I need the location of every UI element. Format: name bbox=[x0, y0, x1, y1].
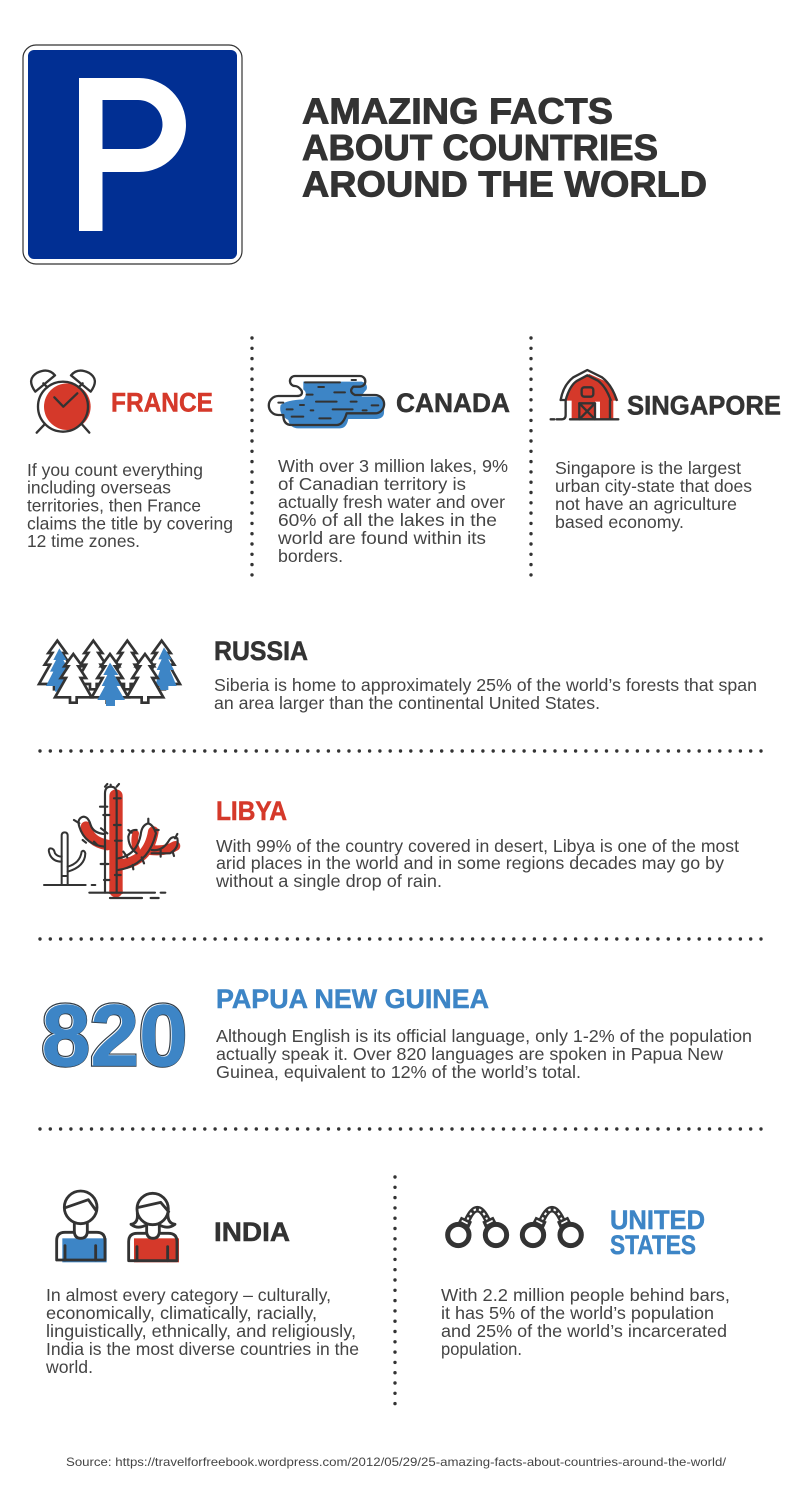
text: Singapore fact: based economy. bbox=[555, 512, 684, 532]
icon: number 820: 820 bbox=[41, 987, 187, 1084]
heading: Singapore: SINGAPORE bbox=[627, 390, 781, 420]
title: ABOUT COUNTRIES bbox=[302, 127, 658, 168]
text: Papua New Guinea fact: actually speak it. Over 820 languages are spoken in Papua New bbox=[216, 1044, 723, 1064]
icon: cactus bbox=[44, 784, 178, 898]
text: Russia fact: Siberia is home to approximately 25% of the world’s forests that span bbox=[214, 675, 757, 695]
text: India fact: India is the most diverse countries in the bbox=[46, 1339, 359, 1359]
heading: United States: STATES bbox=[610, 1230, 696, 1260]
heading: France: FRANCE bbox=[111, 388, 213, 418]
text: Singapore fact: urban city-state that does bbox=[555, 476, 752, 496]
panel: France bbox=[27, 371, 233, 551]
text: France fact: 12 time zones. bbox=[27, 531, 140, 551]
panel: Libya bbox=[44, 784, 739, 898]
heading: United States: UNITED bbox=[610, 1205, 705, 1235]
text: Papua New Guinea fact: Guinea, equivalent to 12% of the world’s total. bbox=[216, 1062, 581, 1082]
text: Canada fact: borders. bbox=[278, 546, 343, 566]
text: Canada fact: of Canadian territory is bbox=[278, 474, 466, 494]
icon: man and woman bbox=[57, 1191, 179, 1262]
text: Libya fact: without a single drop of rain. bbox=[215, 871, 442, 891]
text: France fact bbox=[27, 460, 233, 551]
text: Canada fact: actually fresh water and over bbox=[278, 492, 505, 512]
panel: United States bbox=[441, 1205, 730, 1359]
text: France fact: claims the title by covering bbox=[27, 514, 233, 534]
text: France fact: territories, then France bbox=[27, 496, 201, 516]
icon: barn bbox=[551, 370, 618, 420]
text: India fact: economically, climatically, racially, bbox=[46, 1303, 317, 1323]
text: Singapore fact bbox=[555, 458, 752, 532]
icon: alarm clock bbox=[31, 371, 95, 433]
heading: Papua New Guinea: PAPUA NEW GUINEA bbox=[216, 984, 489, 1014]
text: United States fact: and 25% of the world’s incarcerated bbox=[441, 1321, 727, 1341]
text: India fact: In almost every category – culturally, bbox=[46, 1285, 331, 1305]
icon: parking sign bbox=[23, 45, 242, 264]
icon: lake bbox=[269, 376, 384, 428]
title: AROUND THE WORLD bbox=[302, 164, 707, 204]
text: Libya fact: With 99% of the country covered in desert, Libya is one of the most bbox=[216, 836, 739, 856]
text: Papua New Guinea fact bbox=[216, 1026, 752, 1082]
text: United States fact: With 2.2 million people behind bars, bbox=[441, 1285, 730, 1305]
panel: India bbox=[45, 1191, 359, 1377]
text: Singapore fact: not have an agriculture bbox=[555, 494, 737, 514]
text: France fact: including overseas bbox=[27, 478, 171, 498]
text: Russia fact: an area larger than the continental United States. bbox=[214, 693, 600, 713]
text: Singapore fact: Singapore is the largest bbox=[555, 458, 741, 478]
text: Canada fact: world are found within its bbox=[277, 528, 486, 548]
heading: India: INDIA bbox=[214, 1217, 290, 1247]
icon: number 820: 820 bbox=[42, 988, 188, 1084]
panel: Russia bbox=[39, 636, 757, 713]
title bbox=[302, 90, 707, 204]
text: India fact: linguistically, ethnically, and religiously, bbox=[46, 1321, 356, 1341]
text: United States fact: it has 5% of the world’s population bbox=[441, 1303, 714, 1323]
text: Russia fact bbox=[214, 675, 757, 713]
text: India fact bbox=[45, 1285, 359, 1377]
heading: Libya: LIBYA bbox=[216, 796, 287, 826]
icon: pine trees bbox=[39, 641, 180, 706]
panel: Papua New Guinea bbox=[41, 984, 752, 1084]
text: Papua New Guinea fact: Although English is its official language, only 1-2% of the population bbox=[216, 1026, 752, 1046]
icon: number 820: 820 bbox=[41, 987, 187, 1084]
text: France fact: If you count everything bbox=[27, 460, 203, 480]
text: United States fact bbox=[441, 1285, 730, 1359]
text: Libya fact bbox=[215, 836, 739, 891]
panel: Canada bbox=[269, 376, 510, 566]
text: United States fact: population. bbox=[441, 1339, 522, 1359]
heading: United States bbox=[610, 1205, 705, 1260]
text: Canada fact: With over 3 million lakes, 9% bbox=[278, 456, 508, 476]
title: AMAZING FACTS bbox=[302, 90, 613, 132]
text: India fact: world. bbox=[45, 1357, 93, 1377]
text: Canada fact: 60% of all the lakes in the bbox=[278, 510, 497, 530]
heading: Canada: CANADA bbox=[396, 388, 510, 418]
panel: Singapore bbox=[551, 370, 781, 532]
text: Canada fact bbox=[277, 456, 508, 566]
icon: handcuffs bbox=[448, 1209, 581, 1246]
source line: Source: https://travelforfreebook.wordpress.com/2012/05/29/25-amazing-facts-about-countries-around-the-world/ bbox=[66, 1455, 727, 1469]
heading: Russia: RUSSIA bbox=[214, 636, 308, 666]
text: Libya fact: arid places in the world and in some regions decades may go by bbox=[216, 853, 724, 873]
